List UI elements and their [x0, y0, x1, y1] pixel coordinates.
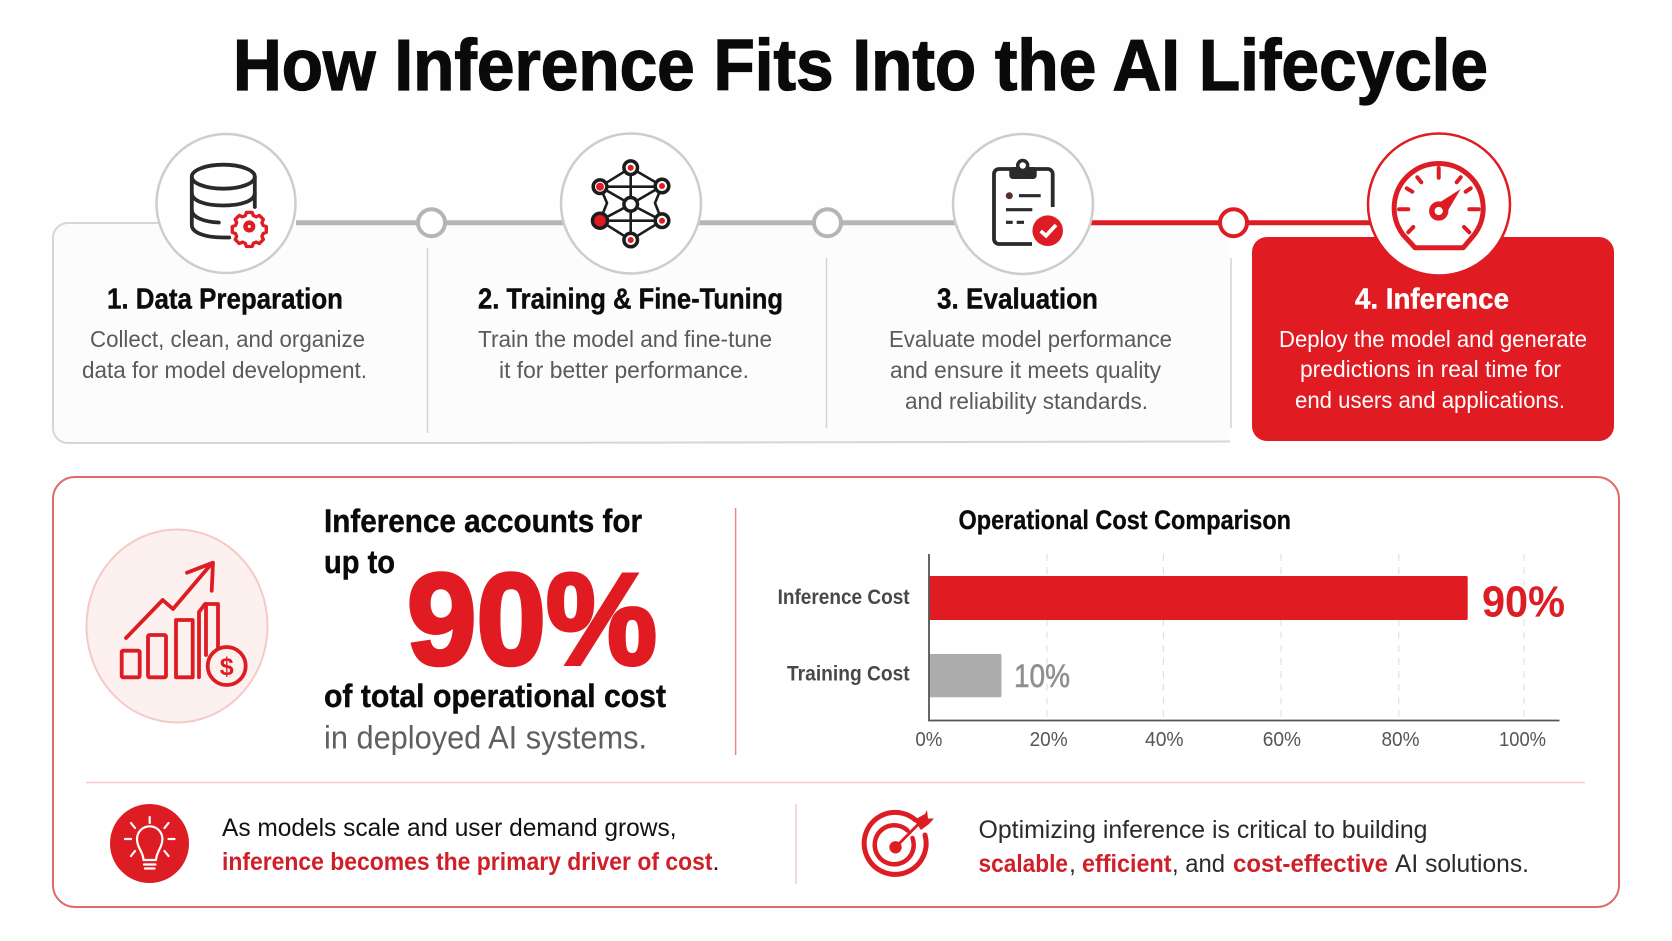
stage 4 text: Deploy the model and generate [1279, 326, 1587, 352]
connector: gray line stage 1 to 3 [296, 220, 961, 225]
bar: training cost [929, 654, 1002, 697]
axis tick labels: 20% [1030, 729, 1068, 751]
stage 3 text: and ensure it meets quality [890, 357, 1161, 383]
icon: rising cost chart: $ [220, 653, 234, 681]
callout: optimization: efficient [1082, 850, 1172, 878]
axis tick labels: 100% [1499, 729, 1546, 751]
category labels: Training Cost [787, 663, 910, 686]
callout: cost driver: . [712, 848, 719, 876]
chart title: Operational Cost Comparison [958, 505, 1291, 535]
callout: optimization: cost-effective [1233, 850, 1388, 878]
icon: clipboard with check [953, 134, 1093, 274]
callout: optimization: , and [1172, 850, 1225, 878]
category labels [778, 586, 910, 686]
icon: neural network [561, 134, 701, 274]
value label 90%: 90% [1482, 578, 1565, 627]
callout: optimization: , [1069, 850, 1076, 878]
stage 3 text: and reliability standards. [905, 388, 1148, 414]
bar: inference cost [929, 576, 1468, 620]
stage 4 text: predictions in real time for [1300, 356, 1561, 382]
callout: cost driver: inference becomes the primary driver of cost [222, 848, 713, 876]
statistic text [324, 503, 666, 756]
value label 10%: 10% [1014, 658, 1070, 694]
icon: target with arrow [864, 810, 934, 874]
stage 1 text: data for model development. [82, 357, 367, 383]
stage 3 text [889, 284, 1172, 414]
connector node 2 [814, 209, 841, 236]
statistic text: in deployed AI systems. [324, 720, 647, 756]
category labels: Inference Cost [778, 586, 910, 609]
connector node 3 [1220, 209, 1247, 236]
callout: optimization: AI solutions. [1395, 850, 1529, 878]
axis tick labels [915, 729, 1546, 751]
panel: stage cards background [53, 223, 1231, 443]
callout: cost driver [222, 814, 719, 876]
title: How Inference Fits Into the AI Lifecycle [233, 26, 1488, 106]
panel: cost summary [53, 477, 1619, 907]
axis tick labels: 0% [915, 729, 943, 751]
stage 2 text: Train the model and fine-tune [478, 326, 772, 352]
callout: optimization [978, 816, 1529, 878]
callout: cost driver: As models scale and user demand grows, [222, 814, 676, 842]
stage 4 text: end users and applications. [1295, 387, 1565, 413]
chart axes [929, 554, 1560, 720]
stage 1 text [82, 284, 367, 383]
panel outline [53, 477, 1619, 907]
stage 3 text: 3. Evaluation [937, 284, 1098, 316]
callout: optimization: Optimizing inference is critical to building [978, 816, 1428, 844]
stage 2 text [478, 284, 783, 383]
connector node 1 [418, 209, 445, 236]
statistic text: up to [324, 544, 395, 580]
stage 3 text: Evaluate model performance [889, 326, 1172, 352]
big number 90%: 90% [407, 546, 657, 692]
connector: red line stage 3 to 4 [1090, 220, 1372, 225]
panel: lifecycle stages [53, 134, 1614, 443]
icon: database with gear [156, 134, 296, 273]
statistic text: of total operational cost [324, 678, 666, 714]
callout: optimization: scalable [978, 850, 1068, 878]
stage 4 text: 4. Inference [1355, 284, 1509, 316]
stage 1 text: 1. Data Preparation [107, 284, 343, 316]
panel: stage 4 red card [1252, 237, 1614, 441]
axis tick labels: 80% [1382, 729, 1420, 751]
stage 1 text: Collect, clean, and organize [90, 326, 365, 352]
axis tick labels: 60% [1263, 729, 1301, 751]
axis tick labels: 40% [1145, 729, 1184, 751]
icon: speedometer gauge [1368, 134, 1510, 276]
stage 2 text: it for better performance. [499, 357, 749, 383]
bar chart: operational cost comparison [778, 505, 1565, 751]
stage 4 text [1279, 284, 1587, 413]
icon: light bulb [110, 804, 189, 883]
stage 2 text: 2. Training & Fine-Tuning [478, 284, 783, 316]
statistic text: Inference accounts for [324, 503, 642, 539]
icon: rising cost chart [86, 530, 268, 722]
